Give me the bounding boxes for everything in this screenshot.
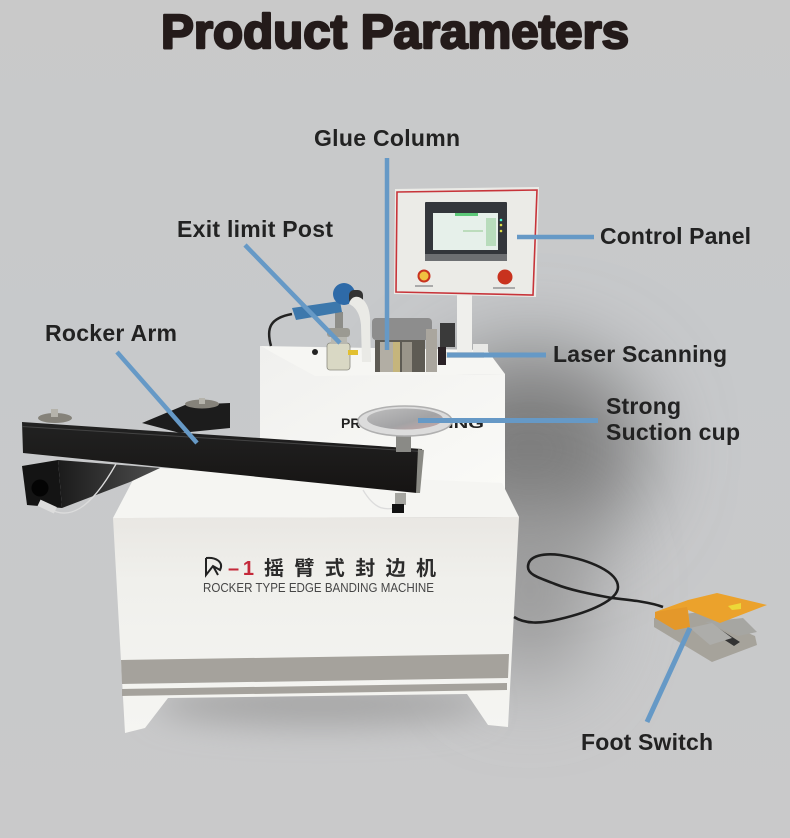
label: strong suction cup: Suction cup [606, 419, 740, 445]
machine name chinese: 摇臂式封边机 [264, 557, 436, 580]
upper machine cabinet [260, 346, 505, 490]
power indicator [415, 270, 433, 287]
support column [457, 294, 472, 354]
pivot caps [38, 398, 219, 423]
machine name english: ROCKER TYPE EDGE BANDING MACHINE [203, 580, 434, 595]
foot switch [514, 554, 767, 662]
emergency stop [493, 270, 515, 289]
base plate [654, 612, 757, 662]
pivot block [58, 460, 160, 508]
label: exit limit post: Exit limit Post [177, 216, 333, 242]
exit limit post [327, 312, 350, 370]
cabinet lettering [341, 415, 484, 431]
label: rocker arm: Rocker Arm [45, 320, 177, 346]
pedals [705, 618, 757, 636]
panel red trim [396, 190, 537, 295]
suction cup disc [358, 406, 452, 436]
callout line: exit limit post [245, 245, 340, 343]
label: laser scanning: Laser Scanning [553, 341, 727, 367]
callout line: suction cup [418, 418, 598, 423]
sensor bracket [426, 329, 437, 372]
panel face [394, 187, 539, 297]
cable [514, 554, 663, 623]
heat gun [269, 283, 371, 362]
label: strong suction cup: Strong [606, 393, 681, 419]
label: control panel: Control Panel [600, 223, 751, 249]
air hose [47, 464, 395, 513]
model number: –1 [228, 558, 254, 580]
title: Product Parameters [161, 6, 629, 59]
callout line: rocker arm [117, 352, 197, 443]
grey stripes [121, 654, 509, 684]
control panel [394, 187, 539, 354]
cabinet lettering: PR [341, 415, 360, 431]
glue and trimming unit [269, 283, 488, 372]
callout line: foot switch [647, 628, 690, 722]
valve [395, 493, 406, 505]
suction cup stem [396, 433, 411, 452]
glue column [372, 318, 432, 340]
label: foot switch: Foot Switch [581, 729, 713, 755]
yellow cover [655, 593, 767, 630]
main beam [22, 422, 422, 493]
rocker arm [22, 398, 452, 514]
touch screen [425, 202, 507, 261]
label: glue column: Glue Column [314, 125, 460, 151]
label: strong suction cup [606, 393, 740, 445]
logo mark [206, 558, 221, 575]
cabinet lettering: ING [448, 415, 484, 431]
callout line: laser scanning [447, 352, 546, 358]
callout line: glue column [385, 158, 389, 350]
lower machine cabinet [113, 468, 519, 733]
callout line: control panel [517, 235, 594, 239]
rear arm [142, 403, 230, 433]
